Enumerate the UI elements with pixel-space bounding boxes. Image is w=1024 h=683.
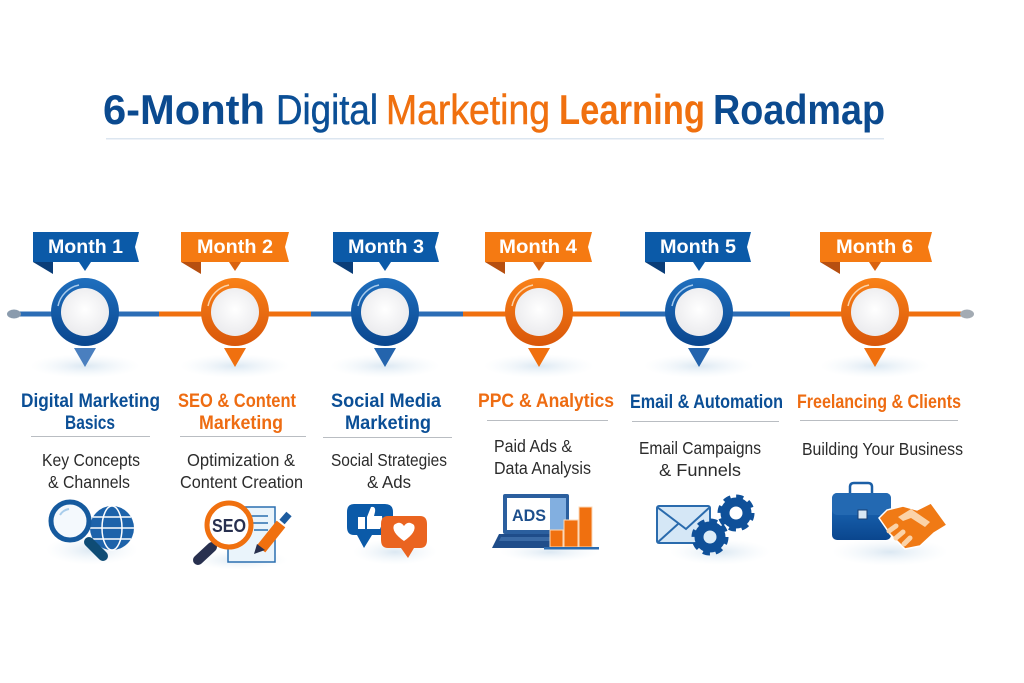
month 4 description: Paid Ads & [494, 436, 572, 456]
title: Learning [559, 86, 705, 133]
title: 6-Month [103, 86, 265, 133]
month 6 heading: Freelancing & Clients [797, 392, 961, 413]
month 4 description [494, 436, 591, 478]
icon: laptop with ADS and bars: ADS [512, 506, 546, 525]
month 2 banner [181, 232, 289, 274]
icon: SEO magnifier and document [192, 503, 289, 570]
month 6 banner: Month 6 [836, 237, 913, 258]
month 5 heading: Email & Automation [630, 392, 783, 413]
month 5 pin [644, 278, 754, 378]
icon: envelope and gears [657, 497, 770, 565]
month 3 banner: Month 3 [348, 237, 424, 258]
month 3 heading [331, 391, 441, 434]
month 2 pin [180, 278, 290, 378]
month 5 description: & Funnels [659, 460, 741, 480]
icon: briefcase and handshake [832, 483, 948, 566]
month 2 description [180, 450, 303, 492]
icon: like and heart bubbles [347, 504, 437, 565]
month 5 banner: Month 5 [660, 237, 736, 258]
month 1 description: & Channels [48, 472, 130, 492]
title: Roadmap [713, 86, 885, 133]
title: Digital [276, 86, 378, 133]
month 3 pin [330, 278, 440, 378]
month 3 description: & Ads [367, 472, 411, 492]
month 4 heading: PPC & Analytics [478, 391, 614, 412]
month 4 banner: Month 4 [499, 237, 577, 258]
month 4 banner [485, 232, 592, 274]
month 2 description: Content Creation [180, 472, 303, 492]
month 4 pin [484, 278, 594, 378]
month 1 heading [21, 391, 160, 434]
month 1 description: Key Concepts [42, 450, 140, 470]
month 2 banner: Month 2 [197, 237, 273, 258]
timeline track [7, 310, 974, 318]
month 3 banner [333, 232, 439, 274]
icon: magnifier and globe [46, 502, 138, 565]
month 3 heading: Marketing [345, 413, 431, 434]
title [103, 86, 885, 133]
month 2 heading: SEO & Content [178, 391, 297, 412]
month 1 heading: Basics [65, 413, 115, 434]
month 1 banner: Month 1 [48, 237, 123, 258]
month 1 heading: Digital Marketing [21, 391, 160, 412]
month 1 banner [33, 232, 139, 274]
month 3 description: Social Strategies [331, 450, 447, 470]
title: Marketing [386, 86, 550, 133]
month 3 heading: Social Media [331, 391, 441, 412]
month 4 description: Data Analysis [494, 458, 591, 478]
month 5 description [639, 438, 761, 480]
icon: laptop with ADS and bars [492, 494, 600, 562]
month 6 description: Building Your Business [802, 439, 963, 459]
month 2 heading [178, 391, 297, 434]
month 6 banner [820, 232, 932, 274]
month 6 pin [820, 278, 930, 378]
month 3 description [331, 450, 447, 492]
month 1 description [42, 450, 140, 492]
month 5 description: Email Campaigns [639, 438, 761, 458]
month 2 description: Optimization & [187, 450, 295, 470]
month 1 pin [30, 278, 140, 378]
month 2 heading: Marketing [199, 413, 283, 434]
icon: SEO magnifier and document: SEO [212, 516, 246, 536]
month 5 banner [645, 232, 751, 274]
